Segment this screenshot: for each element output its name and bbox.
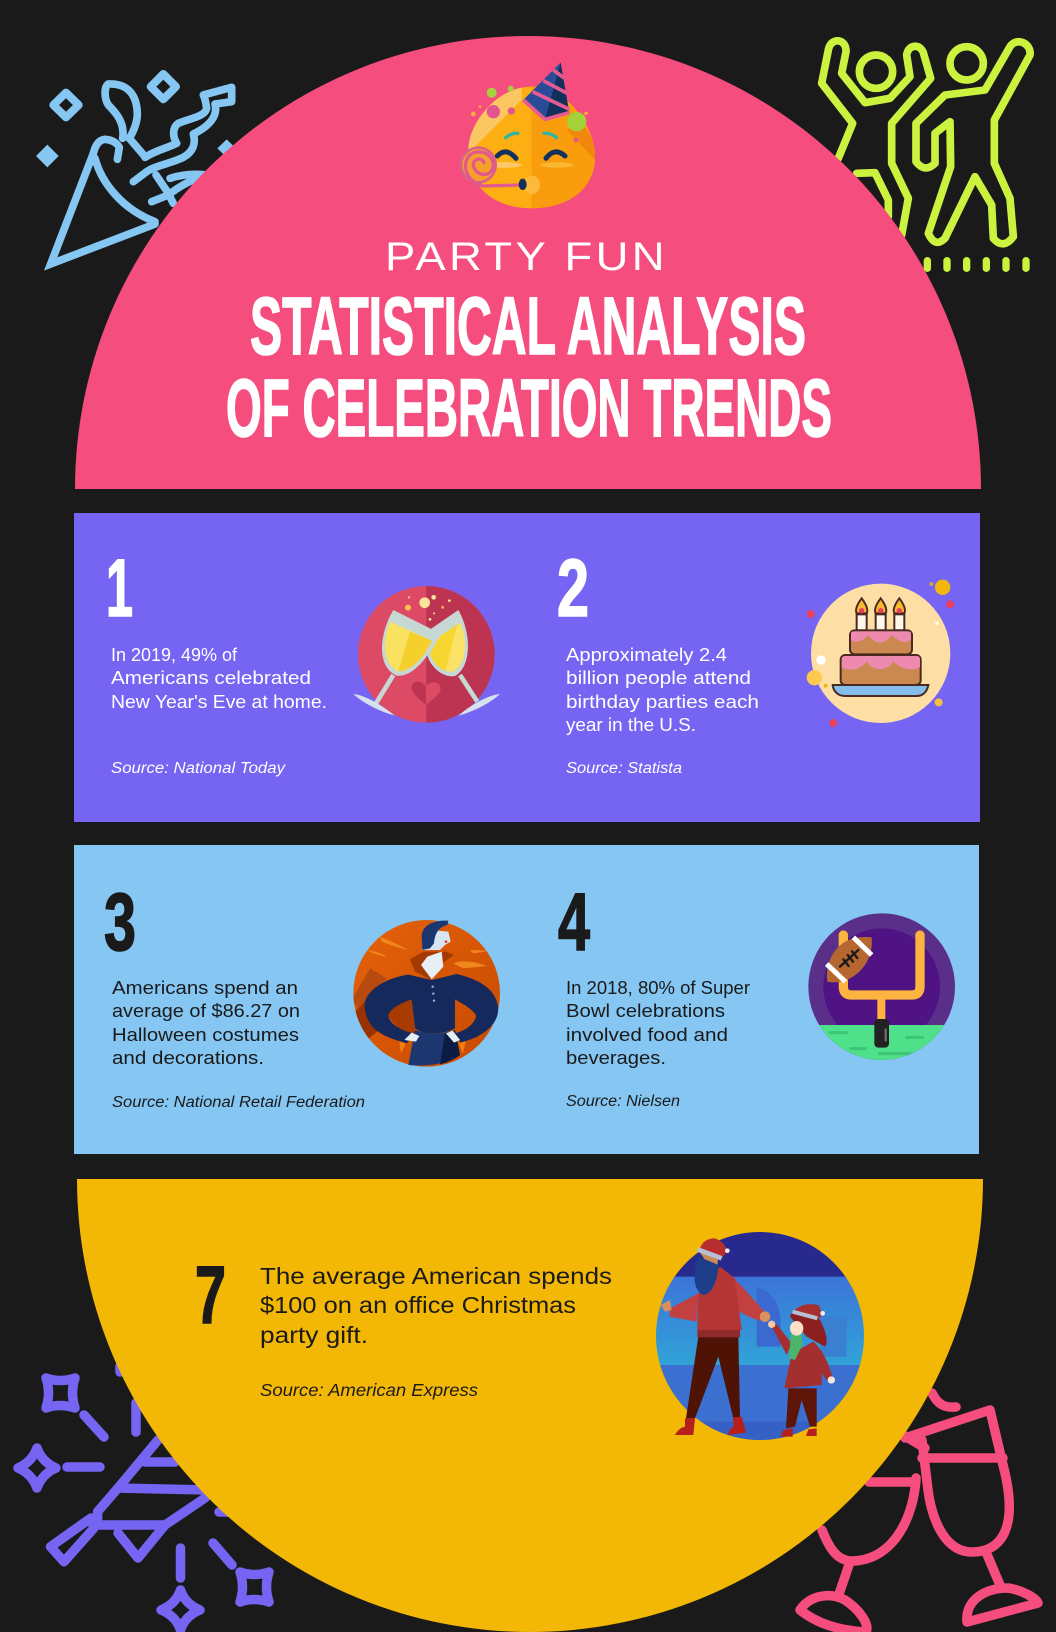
stat 4 text: involved food and xyxy=(566,1024,728,1045)
stat 2 source: Source: Statista xyxy=(566,760,682,777)
stat 2 text: billion people attend xyxy=(566,667,751,688)
stat 2 text: year in the U.S. xyxy=(566,714,696,735)
stat 7 source: Source: American Express xyxy=(260,1380,478,1400)
stat 2 text: birthday parties each xyxy=(566,691,759,712)
icon: blue party popper outline xyxy=(36,74,236,264)
title xyxy=(226,281,832,454)
stat 3 text: average of $86.27 on xyxy=(112,1000,300,1021)
stat 2 text xyxy=(566,644,759,735)
panel: yellow half circle xyxy=(77,1179,983,1632)
stat 7 text xyxy=(260,1263,612,1348)
icon: purple party popper outline xyxy=(18,1366,269,1630)
icon: birthday cake xyxy=(807,580,954,727)
icon: party face emoji xyxy=(461,63,600,210)
stat 7 text: The average American spends xyxy=(260,1263,612,1289)
stat 3 text: Halloween costumes xyxy=(112,1024,299,1045)
number 4: 4 xyxy=(558,877,590,968)
number 2: 2 xyxy=(557,543,589,634)
icon: lime dancers outline xyxy=(822,41,1030,268)
stat 1 text: Americans celebrated xyxy=(111,667,311,688)
stat 7 text: party gift. xyxy=(260,1322,368,1348)
icon: pink champagne glasses outline xyxy=(800,1393,1038,1632)
icon: vampire in cape xyxy=(352,920,500,1067)
stat 3 source: Source: National Retail Federation xyxy=(112,1094,365,1111)
stat 1 text: New Year's Eve at home. xyxy=(111,691,327,712)
panel: pink header half circle xyxy=(75,36,981,489)
stat 3 text: and decorations. xyxy=(112,1047,264,1068)
stat 7 text: $100 on an office Christmas xyxy=(260,1292,576,1318)
number 7: 7 xyxy=(195,1250,226,1341)
stat 4 text: In 2018, 80% of Super xyxy=(566,977,750,998)
stat 1 text: In 2019, 49% of xyxy=(111,644,238,665)
subtitle: PARTY FUN xyxy=(385,235,668,279)
number 1: 1 xyxy=(106,543,133,634)
stat 1 source: Source: National Today xyxy=(111,760,286,777)
stat 4 text: Bowl celebrations xyxy=(566,1000,725,1021)
stat 4 text: beverages. xyxy=(566,1047,666,1068)
icon: football and goal post xyxy=(803,913,960,1062)
stat 4 text xyxy=(566,977,750,1068)
icon: champagne toast xyxy=(353,586,500,723)
stat 2 text: Approximately 2.4 xyxy=(566,644,727,665)
panel: purple stats 1 and 2 xyxy=(74,513,980,822)
icon: skaters in santa hats xyxy=(653,1230,867,1442)
stat 4 source: Source: Nielsen xyxy=(566,1093,680,1110)
stat 3 text: Americans spend an xyxy=(112,977,298,998)
stat 1 text xyxy=(111,644,327,712)
stat 3 text xyxy=(112,977,300,1068)
panel: light blue stats 3 and 4 xyxy=(74,845,979,1154)
number 3: 3 xyxy=(104,877,136,968)
